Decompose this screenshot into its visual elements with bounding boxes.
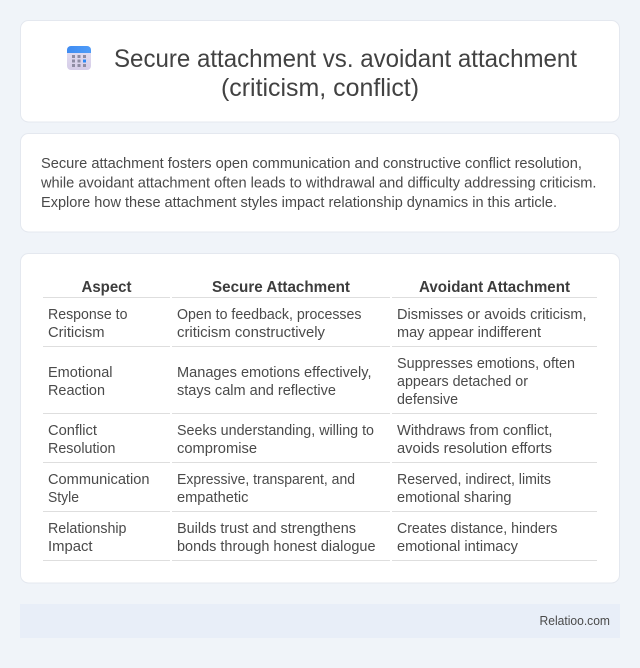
title text: Secure attachment vs. avoidant attachment: [114, 45, 577, 73]
row: communication style: Reserved, indirect, limits: [397, 472, 551, 488]
row: response to criticism: [48, 307, 586, 341]
row: relationship impact: Relationship: [48, 521, 126, 537]
row: response to criticism: Criticism: [48, 325, 105, 341]
icon: calendar: [67, 46, 91, 70]
row: conflict resolution: Withdraws from conflict,: [397, 423, 552, 439]
row: emotional reaction: appears detached or: [397, 374, 528, 390]
row: response to criticism: Response to: [48, 307, 128, 323]
row: conflict resolution: Conflict: [48, 423, 97, 439]
row: communication style: emotional sharing: [397, 490, 512, 506]
row: conflict resolution: avoids resolution efforts: [397, 441, 552, 457]
intro text: Explore how these attachment styles impact relationship dynamics in this article.: [41, 195, 557, 211]
table header: Avoidant Attachment: [419, 279, 571, 296]
panel: introduction: [20, 134, 620, 232]
row: emotional reaction: Manages emotions effectively,: [177, 365, 372, 381]
footer: [20, 604, 620, 638]
table header: Secure Attachment: [212, 279, 351, 296]
table header: Aspect: [82, 279, 132, 296]
row: communication style: Communication: [48, 472, 150, 488]
row: conflict resolution: compromise: [177, 441, 257, 457]
row: relationship impact: bonds through honest dialogue: [177, 539, 376, 555]
intro text: Secure attachment fosters open communication and constructive conflict resolution,: [41, 156, 582, 172]
row: relationship impact: Impact: [48, 539, 93, 555]
row: response to criticism: Open to feedback, processes: [177, 307, 362, 323]
row: response to criticism: may appear indifferent: [397, 325, 541, 341]
row: emotional reaction: stays calm and reflective: [177, 383, 336, 399]
row: communication style: Style: [48, 490, 79, 506]
row: relationship impact: [48, 521, 558, 555]
intro text: [40, 156, 597, 211]
row: relationship impact: Creates distance, hinders: [397, 521, 558, 537]
panel: title: [20, 20, 620, 122]
title text: [114, 45, 577, 102]
row: communication style: [48, 472, 551, 506]
row: conflict resolution: [48, 423, 552, 457]
row: emotional reaction: Suppresses emotions, often: [397, 356, 575, 372]
row: relationship impact: Builds trust and strengthens: [177, 521, 356, 537]
title text: (criticism, conflict): [221, 74, 419, 102]
intro text: while avoidant attachment often leads to withdrawal and difficulty addressing criticism.: [40, 176, 597, 192]
row: communication style: empathetic: [177, 490, 248, 506]
row: conflict resolution: Resolution: [48, 441, 116, 457]
row: conflict resolution: Seeks understanding, willing to: [177, 423, 374, 439]
row: communication style: Expressive, transparent, and: [177, 472, 355, 488]
panel: comparison table: [20, 254, 620, 583]
row: response to criticism: criticism constructively: [177, 325, 326, 341]
row: response to criticism: Dismisses or avoids criticism,: [397, 307, 586, 323]
row: emotional reaction: [48, 356, 575, 408]
row: emotional reaction: defensive: [397, 392, 458, 408]
footer text: Relatioo.com: [540, 614, 610, 628]
table header: [82, 279, 571, 296]
row: emotional reaction: Emotional: [48, 365, 112, 381]
row: emotional reaction: Reaction: [48, 383, 105, 399]
row: relationship impact: emotional intimacy: [397, 539, 519, 555]
